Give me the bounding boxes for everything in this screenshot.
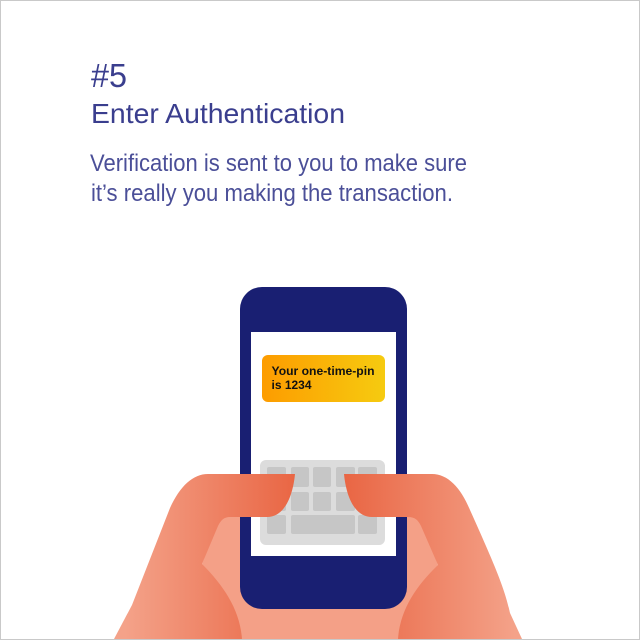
phone screen xyxy=(251,332,396,556)
message bubble xyxy=(262,355,385,402)
message bubble: Your one-time-pin xyxy=(272,366,374,378)
message bubble: is 1234 xyxy=(272,380,312,392)
phone body xyxy=(240,287,407,609)
keyboard xyxy=(260,460,385,545)
palm xyxy=(202,505,438,639)
heading: step title: Enter Authentication xyxy=(91,98,345,129)
right hand xyxy=(344,474,522,639)
body text: Verification is sent to you to make sure xyxy=(90,150,467,177)
illustration: hands holding phone xyxy=(114,287,522,639)
body text: it’s really you making the transaction. xyxy=(91,180,453,207)
body text xyxy=(90,150,467,207)
left hand xyxy=(114,474,295,639)
heading: step number: #5 xyxy=(91,57,127,94)
phone xyxy=(240,287,407,609)
